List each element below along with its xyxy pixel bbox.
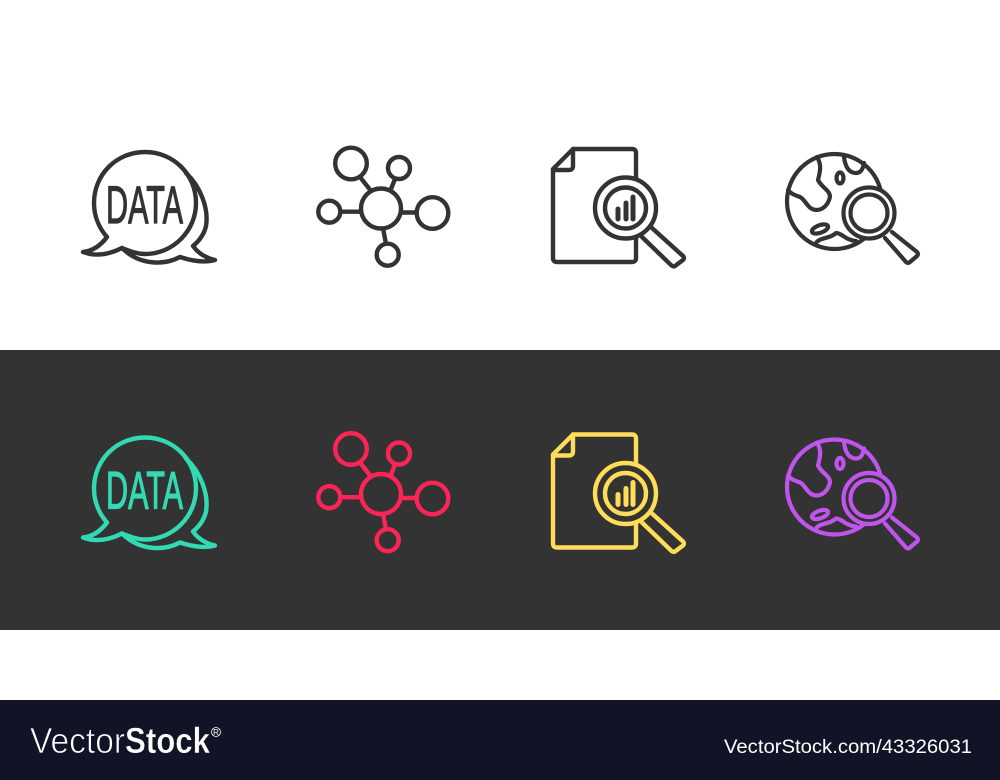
icon: globe with magnifier, purple [787, 440, 918, 548]
icon: document with magnifier, dark [553, 149, 684, 266]
text: DATA: DATA [106, 176, 183, 235]
logo: registered mark [212, 728, 220, 737]
logo: VectorStock: Stock [125, 720, 211, 761]
panel: dark band [0, 350, 1000, 630]
icon: data speech bubbles, dark [83, 152, 215, 262]
icon: data speech bubbles, teal [83, 438, 215, 548]
icon: network hub, dark [318, 148, 448, 266]
icon: network hub, red [318, 433, 448, 551]
logo: VectorStock: Vector [30, 720, 125, 761]
footer: image id: VectorStock.com/43326031 [724, 737, 972, 758]
logo: registered mark: R [213, 728, 219, 737]
icon: globe with magnifier, dark [787, 154, 918, 263]
footer bar [0, 700, 1000, 780]
logo: VectorStock [30, 720, 211, 761]
text: DATA teal: DATA [106, 462, 183, 520]
icon: document with magnifier, yellow [553, 434, 684, 552]
